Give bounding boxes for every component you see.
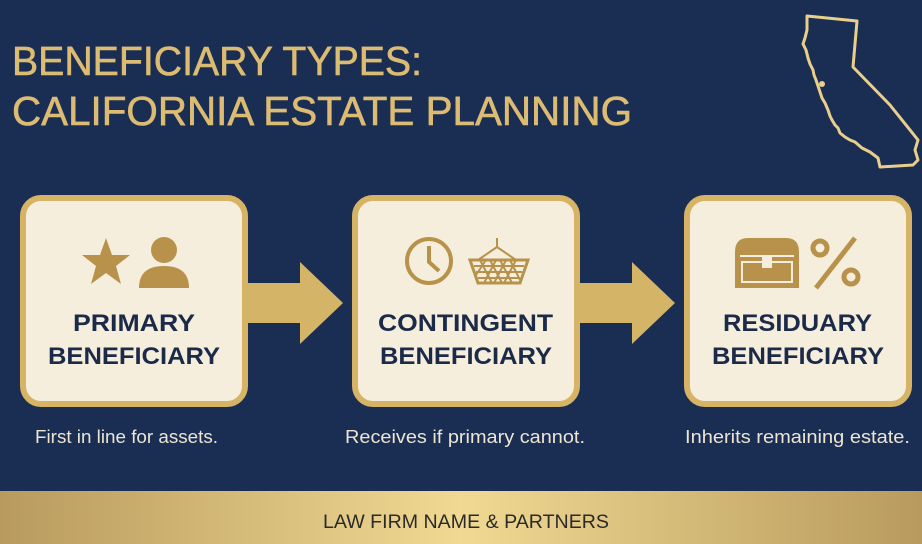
icon: clock xyxy=(407,239,451,283)
icon: star xyxy=(82,238,130,284)
footer xyxy=(0,491,922,544)
panel: primary: BENEFICIARY xyxy=(48,343,220,370)
icon: california outline xyxy=(803,16,918,167)
captions xyxy=(35,427,910,447)
icon: net xyxy=(470,238,528,283)
captions: Inherits remaining estate. xyxy=(685,427,910,447)
title: CALIFORNIA ESTATE PLANNING xyxy=(12,88,632,134)
panel: contingent: CONTINGENT xyxy=(378,310,553,337)
footer: LAW FIRM NAME & PARTNERS xyxy=(323,512,609,533)
icon: person xyxy=(139,237,189,288)
icon: treasure chest xyxy=(735,238,799,288)
arrow 1 xyxy=(245,262,343,344)
title xyxy=(12,38,632,134)
arrow 2 xyxy=(577,262,675,344)
panel: residuary xyxy=(687,198,909,404)
panel: contingent xyxy=(355,198,577,404)
title: BENEFICIARY TYPES: xyxy=(12,38,422,84)
captions: First in line for assets. xyxy=(35,427,218,447)
panel: residuary: BENEFICIARY xyxy=(712,343,884,370)
icon: percent xyxy=(813,238,858,288)
panel: primary xyxy=(23,198,245,404)
panel: primary: PRIMARY xyxy=(73,310,195,337)
captions: Receives if primary cannot. xyxy=(345,427,585,447)
panel: contingent: BENEFICIARY xyxy=(380,343,552,370)
panel: residuary: RESIDUARY xyxy=(723,310,872,337)
